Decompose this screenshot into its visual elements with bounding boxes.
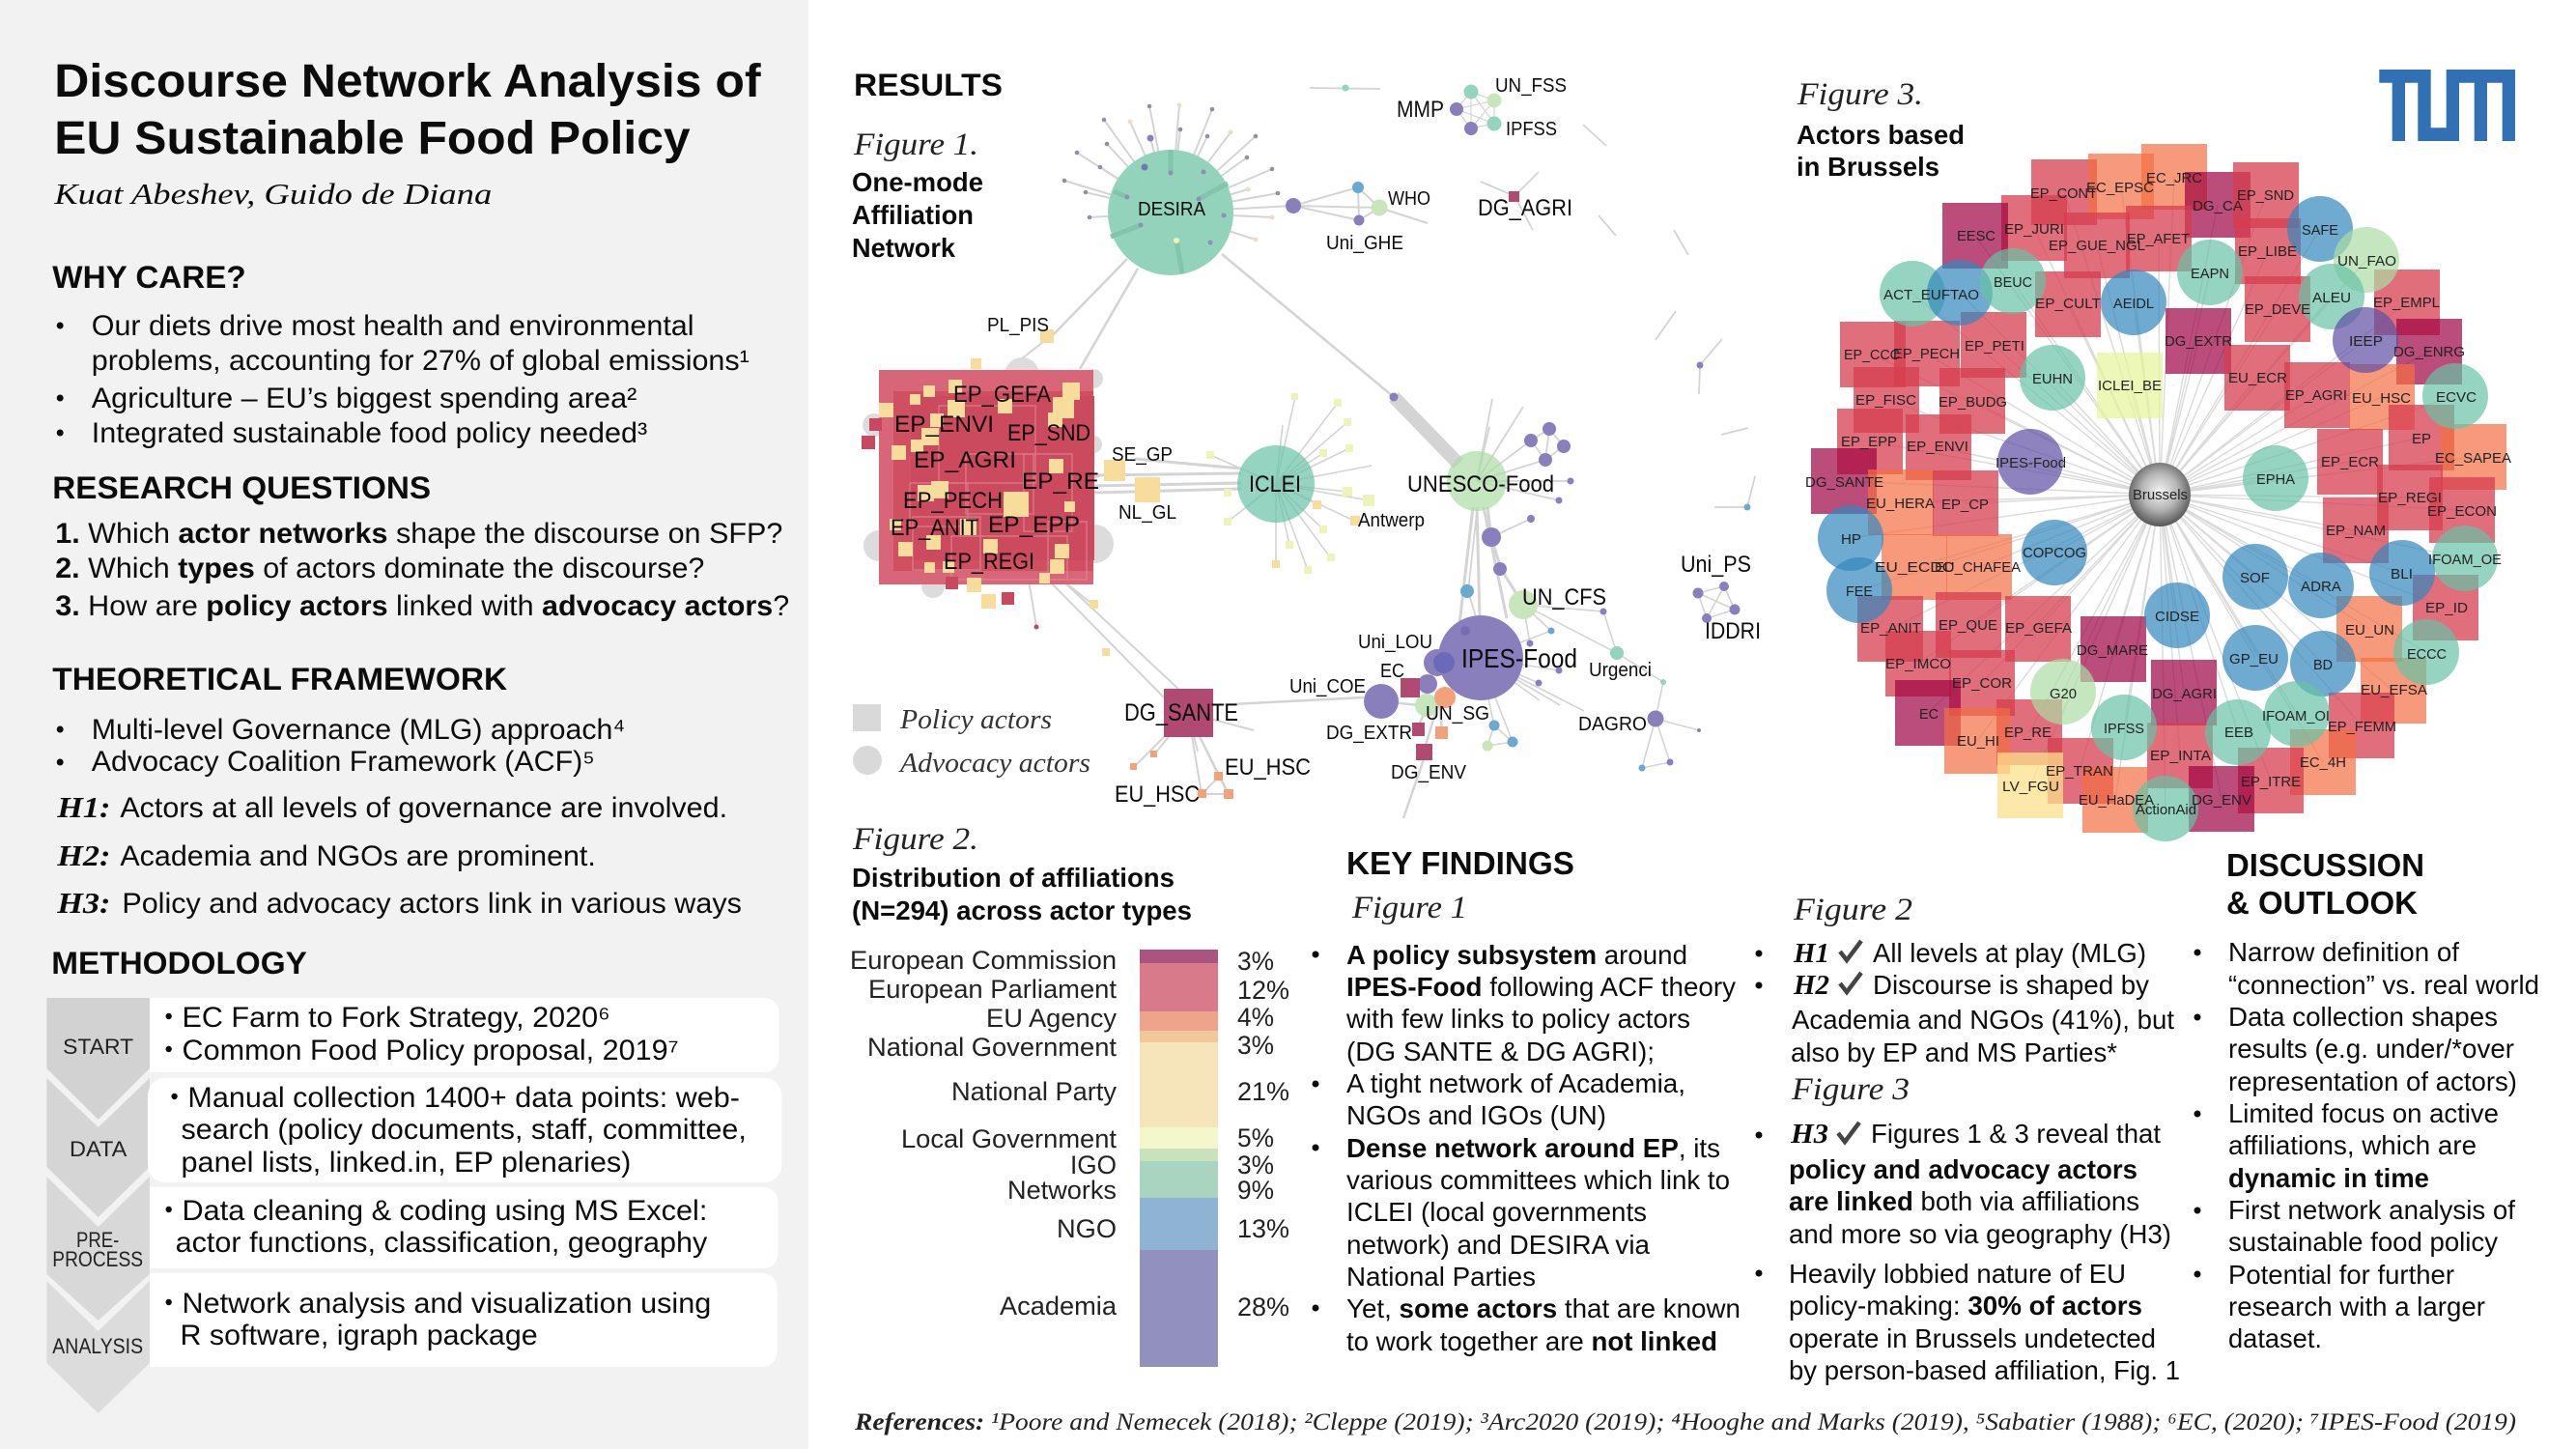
actor labels: EP_ENVI: [1907, 439, 1968, 455]
node labels: UN_FSS: [1495, 75, 1567, 97]
small nodes: [1033, 85, 1750, 799]
node labels: IDDRI: [1705, 618, 1761, 644]
actor labels: ActionAid: [2136, 802, 2196, 818]
section: key findings: KEY FINDINGS: [1346, 845, 1574, 881]
section: key findings figures 2 and 3: Discourse is shaped by: [1873, 970, 2149, 1000]
actor labels: [1805, 170, 2511, 818]
section: why care: problems, accounting for 27% of global emissions¹: [92, 345, 750, 377]
section: key findings figures 2 and 3: operate in Brussels undetected: [1789, 1323, 2156, 1353]
section: theoretical framework: Policy and advocacy actors link in various ways: [122, 888, 742, 920]
figure 1: affiliation network: [862, 75, 1761, 818]
actor labels: GP_EU: [2229, 651, 2279, 668]
section: key findings figures 2 and 3: are linked both via affiliations: [1789, 1186, 2139, 1216]
actor labels: EU_UN: [2345, 622, 2394, 639]
section: discussion and outlook: sustainable food policy: [2228, 1227, 2498, 1257]
section: why care: WHY CARE?: [52, 260, 246, 295]
node labels: Urgenci: [1589, 660, 1652, 681]
figure 3 caption: [1797, 77, 1965, 182]
legend: [853, 704, 1090, 779]
actor labels: IPES-Food: [1996, 455, 2066, 471]
actor labels: EU_HaDEA: [2079, 792, 2154, 809]
actor labels: IEEP: [2349, 333, 2383, 350]
section: research questions: 2. Which types of actors dominate the discourse?: [55, 553, 704, 584]
actor labels: EESC: [1957, 228, 1996, 244]
actor labels: EC: [1919, 706, 1939, 723]
figure 1 caption: One-mode: [852, 167, 983, 197]
box: analysis: Network analysis and visualization using: [183, 1288, 711, 1320]
actor labels: EC_JRC: [2146, 170, 2202, 186]
actor labels: EP_ECR: [2321, 454, 2379, 470]
figure 2 caption: Distribution of affiliations: [852, 863, 1175, 893]
arrow: pre-process: PRE-: [76, 1228, 119, 1252]
category labels: National Party: [951, 1077, 1117, 1106]
icon: check: [1838, 1122, 1859, 1142]
node labels: [891, 75, 1761, 808]
section: theoretical framework: Multi-level Governance (MLG) approach⁴: [92, 714, 625, 746]
panel: left sidebar: [0, 0, 808, 1449]
node: IPES-Food: IPES-Food: [1461, 643, 1577, 673]
node labels: EP_PECH: [903, 488, 1003, 514]
node labels: WHO: [1388, 188, 1430, 210]
node labels: EP_GEFA: [953, 382, 1051, 408]
percentages: 12%: [1237, 976, 1289, 1005]
section: key findings: NGOs and IGOs (UN): [1346, 1100, 1606, 1130]
actor labels: Brussels: [2133, 487, 2188, 503]
advocacy actor circles: [1818, 196, 2498, 841]
section: key findings figures 2 and 3: policy and advocacy actors: [1789, 1154, 2137, 1184]
actor labels: EP_RE: [2004, 724, 2052, 741]
icon: check: [1840, 941, 1861, 960]
methodology flow: [46, 998, 781, 1413]
percentages: 13%: [1237, 1214, 1289, 1243]
actor labels: ECCC: [2407, 646, 2447, 663]
section: key findings figures 2 and 3: H3: [1790, 1119, 1828, 1150]
actor labels: EP: [2412, 431, 2431, 447]
section: key findings figures 2 and 3: H1: [1793, 938, 1829, 969]
category labels: European Commission: [850, 946, 1117, 975]
arrow: pre-process: [46, 1177, 150, 1321]
node labels: DG_AGRI: [1478, 195, 1572, 221]
box: pre-process: [150, 1187, 778, 1268]
percentages: 9%: [1237, 1176, 1274, 1205]
actor labels: EP_ITRE: [2241, 774, 2301, 790]
actor labels: EP_ECON: [2427, 503, 2497, 520]
actor labels: EC_SAPEA: [2435, 450, 2511, 467]
section: discussion and outlook: First network analysis of: [2228, 1195, 2515, 1225]
section: key findings figures 2 and 3: [1756, 893, 2180, 1385]
actor labels: EP_AGRI: [2285, 387, 2347, 404]
actor labels: EU_HSC: [2352, 390, 2411, 407]
section: key findings: [1312, 845, 1741, 1356]
node: Brussels hub: [2129, 463, 2191, 526]
section: why care: Our diets drive most health and environmental: [92, 310, 694, 342]
node labels: NL_GL: [1118, 502, 1176, 524]
section: why care: [52, 260, 750, 449]
percentages: 5%: [1237, 1123, 1274, 1152]
actor labels: ICLEI_BE: [2098, 378, 2162, 394]
title: Discourse Network Analysis of: [54, 56, 761, 107]
node: ICLEI: ICLEI: [1249, 471, 1301, 497]
section: key findings: A tight network of Academia,: [1346, 1068, 1685, 1098]
title: [54, 56, 761, 164]
section: key findings: Yet, some actors that are known: [1346, 1293, 1741, 1323]
actor labels: EC_EPSC: [2086, 180, 2154, 196]
policy actor squares: [1811, 144, 2506, 833]
box: start: [150, 998, 778, 1072]
arrow: analysis: [46, 1281, 150, 1413]
edges: [1005, 88, 1755, 818]
actor labels: AEIDL: [2113, 296, 2154, 312]
actor labels: EPHA: [2256, 471, 2295, 488]
node labels: EU_HSC: [1115, 781, 1200, 808]
heading: methodology: METHODOLOGY: [51, 946, 307, 980]
actor labels: EU_ECDC: [1875, 559, 1954, 576]
figure 2 caption: (N=294) across actor types: [852, 895, 1192, 925]
actor labels: DG_SANTE: [1805, 474, 1883, 491]
section: key findings: to work together are not linked: [1346, 1326, 1717, 1356]
references: References: ¹Poore and Nemecek (2018); ²Cleppe (2019); ³Arc2020 (2019); ⁴Hooghe and Marks (2019), ⁵Sabatier (1988); ⁶EC, (2020); ⁷IPES-Food (2019): [854, 1409, 2516, 1435]
node labels: EP_SND: [1007, 420, 1090, 446]
box: start: EC Farm to Fork Strategy, 2020⁶: [183, 1002, 610, 1034]
node labels: Antwerp: [1358, 510, 1425, 531]
node: IPES-Food: [1438, 615, 1577, 700]
actor labels: CIDSE: [2155, 609, 2199, 625]
section: discussion and outlook: Data collection shapes: [2228, 1002, 2498, 1032]
box: data: search (policy documents, staff, committee,: [182, 1114, 747, 1146]
node labels: EC: [1380, 661, 1404, 682]
section: key findings figures 2 and 3: also by EP and MS Parties*: [1791, 1037, 2117, 1067]
heading: results: RESULTS: [854, 68, 1003, 102]
section: key findings: A policy subsystem around: [1346, 940, 1687, 970]
section: theoretical framework: Academia and NGOs are prominent.: [120, 840, 596, 872]
section: key findings: Figure 1: [1351, 891, 1467, 925]
actor labels: EP_GUE_NGL: [2049, 238, 2145, 254]
section: discussion and outlook: representation of actors): [2228, 1066, 2517, 1096]
actor labels: DG_EXTR: [2165, 333, 2232, 350]
EP cluster: [862, 329, 1160, 609]
node: DG_SANTE: [1124, 689, 1238, 737]
section: theoretical framework: H3:: [56, 887, 110, 920]
node: ICLEI: [1237, 445, 1315, 523]
box: data: Manual collection 1400+ data points: web-: [187, 1082, 740, 1114]
actor labels: EU_EFSA: [2361, 682, 2427, 698]
actor labels: EUHN: [2032, 371, 2073, 387]
node labels: Uni_LOU: [1358, 632, 1432, 653]
section: key findings figures 2 and 3: by person-based affiliation, Fig. 1: [1789, 1355, 2180, 1385]
figure 1 caption: Network: [852, 233, 955, 263]
node: DESIRA: DESIRA: [1138, 199, 1206, 220]
node labels: IPFSS: [1506, 119, 1557, 140]
section: theoretical framework: THEORETICAL FRAMEWORK: [52, 662, 507, 696]
section: discussion and outlook: “connection” vs. real world: [2228, 970, 2539, 1000]
percentages: 3%: [1237, 1031, 1274, 1060]
actor labels: ALEU: [2312, 290, 2351, 306]
node labels: EP_AGRI: [914, 447, 1016, 473]
section: discussion and outlook: Potential for further: [2228, 1260, 2454, 1290]
actor labels: EP_ID: [2425, 600, 2468, 616]
actor labels: IFOAM_OI: [2262, 708, 2330, 724]
arrow: data: [46, 1078, 150, 1217]
spokes: [1844, 177, 2474, 809]
figure 3 caption: Actors based: [1797, 120, 1965, 150]
actor labels: EP_AFET: [2127, 231, 2190, 247]
legend: Advocacy actors: [898, 749, 1090, 779]
actor labels: EP_PECH: [1893, 346, 1960, 362]
actor labels: DG_ENRG: [2393, 344, 2465, 360]
stacked bar: [1140, 950, 1218, 1367]
section: key findings: (DG SANTE & DG AGRI);: [1346, 1037, 1655, 1066]
node labels: Uni_PS: [1681, 552, 1751, 578]
figure 3: Brussels network: [1805, 144, 2511, 841]
actor labels: DG_ENV: [2192, 792, 2251, 809]
actor labels: EP_LIBE: [2238, 243, 2297, 260]
actor labels: BLI: [2391, 566, 2413, 582]
percentages: 21%: [1237, 1077, 1289, 1106]
category labels: Networks: [1007, 1176, 1117, 1205]
actor labels: EP_TRAN: [2046, 763, 2113, 780]
actor labels: EC_4H: [2300, 754, 2346, 771]
actor labels: ECVC: [2436, 389, 2477, 406]
percentages: [1237, 947, 1289, 1321]
section: discussion and outlook: [2194, 847, 2539, 1353]
category labels: NGO: [1057, 1214, 1117, 1243]
section: key findings: ICLEI (local governments: [1346, 1197, 1647, 1227]
section: discussion and outlook: results (e.g. under/*over: [2228, 1034, 2514, 1064]
icon: TUM logo: [2379, 70, 2515, 141]
section: why care: Agriculture – EU’s biggest spending area²: [92, 383, 637, 414]
figure 2 caption: Figure 2.: [852, 822, 978, 857]
section: discussion and outlook: dataset.: [2228, 1323, 2322, 1353]
category labels: Local Government: [901, 1124, 1117, 1153]
section: key findings: with few links to policy actors: [1345, 1004, 1690, 1034]
section: key findings: National Parties: [1346, 1262, 1536, 1292]
DESIRA spoke end dots: [1062, 102, 1280, 242]
section: key findings figures 2 and 3: and more so via geography (H3): [1789, 1219, 2171, 1249]
node labels: DAGRO: [1578, 714, 1647, 735]
actor labels: EP_NAM: [2326, 523, 2386, 539]
actor labels: EP_PETI: [1965, 338, 2024, 355]
category labels: [850, 946, 1118, 1321]
section: research questions: 3. How are policy actors linked with advocacy actors?: [55, 590, 789, 622]
actor labels: DG_MARE: [2077, 642, 2148, 659]
actor labels: UN_FAO: [2337, 253, 2396, 270]
node labels: UN_SG: [1426, 703, 1489, 724]
figure 2 caption: [852, 822, 1192, 925]
category labels: EU Agency: [986, 1004, 1118, 1033]
actor labels: FEE: [1846, 583, 1873, 600]
percentages: 28%: [1237, 1293, 1289, 1321]
arrow: analysis: ANALYSIS: [52, 1334, 143, 1358]
node labels: DG_EXTR: [1326, 723, 1412, 744]
actor labels: EAPN: [2191, 266, 2229, 282]
actor labels: DG_AGRI: [2152, 686, 2217, 702]
box: pre-process: Data cleaning & coding using MS Excel:: [183, 1195, 707, 1227]
box: pre-process: actor functions, classification, geography: [176, 1227, 707, 1259]
figure 1 caption: Affiliation: [852, 200, 974, 230]
figure 1 caption: Figure 1.: [853, 128, 978, 162]
section: key findings figures 2 and 3: Heavily lobbied nature of EU: [1789, 1259, 2126, 1289]
actor labels: IFOAM_OE: [2428, 552, 2502, 568]
title: EU Sustainable Food Policy: [54, 113, 691, 164]
section: key findings: various committees which link to: [1346, 1165, 1730, 1195]
actor labels: EP_FISC: [1855, 392, 1916, 409]
section: key findings figures 2 and 3: All levels at play (MLG): [1873, 938, 2146, 968]
box: analysis: [150, 1273, 777, 1367]
section: theoretical framework: H1:: [56, 791, 110, 824]
figure 3 caption: Figure 3.: [1797, 77, 1923, 112]
node labels: EP_ENVI: [894, 412, 994, 438]
section: research questions: 1. Which actor networks shape the discourse on SFP?: [55, 518, 782, 550]
percentages: 3%: [1237, 1151, 1274, 1179]
actor labels: EP_GEFA: [2005, 620, 2072, 637]
grey blobs behind EP cluster: [863, 357, 1114, 598]
section: key findings figures 2 and 3: H2: [1793, 970, 1829, 1001]
section: key findings figures 2 and 3: Academia and NGOs (41%), but: [1792, 1005, 2174, 1035]
section: discussion and outlook: Narrow definition of: [2228, 937, 2459, 967]
actor labels: EP_INTA: [2150, 748, 2211, 764]
section: theoretical framework: [52, 662, 742, 920]
actor labels: BEUC: [1994, 274, 2032, 291]
section: why care: Integrated sustainable food policy needed³: [92, 417, 647, 449]
actor labels: EP_CP: [1941, 497, 1989, 513]
percentages: 3%: [1237, 947, 1274, 976]
section: theoretical framework: Advocacy Coalition Framework (ACF)⁵: [92, 746, 595, 778]
actor labels: SAFE: [2302, 222, 2338, 239]
percentages: 4%: [1237, 1003, 1274, 1032]
actor labels: DG_CA: [2193, 198, 2243, 214]
box: data: panel lists, linked.in, EP plenaries): [182, 1147, 631, 1179]
actor labels: SOF: [2240, 570, 2270, 586]
node labels: PL_PIS: [987, 315, 1049, 336]
arrow: start: [46, 998, 150, 1120]
actor labels: EP_BUDG: [1939, 394, 2007, 411]
section: discussion and outlook: & OUTLOOK: [2226, 885, 2418, 921]
icon: check: [1840, 973, 1861, 992]
section: key findings: Dense network around EP, its: [1346, 1133, 1720, 1163]
actor labels: COPCOG: [2023, 545, 2086, 561]
actor labels: EEB: [2224, 724, 2253, 741]
actor labels: EP_CULT: [2035, 296, 2101, 312]
section: discussion and outlook: Limited focus on active: [2228, 1098, 2499, 1128]
section: discussion and outlook: DISCUSSION: [2226, 847, 2424, 883]
arrow: pre-process: PROCESS: [52, 1247, 143, 1271]
node: DG_SANTE: DG_SANTE: [1124, 699, 1238, 726]
actor labels: EP_CCC: [1844, 347, 1900, 363]
node labels: EU_HSC: [1225, 754, 1311, 781]
section: key findings: network) and DESIRA via: [1346, 1230, 1651, 1260]
actor labels: EP_FEMM: [2328, 719, 2396, 735]
arrow: start: START: [63, 1035, 133, 1059]
section: key findings figures 2 and 3: policy-making: 30% of actors: [1789, 1291, 2142, 1321]
figure 2: stacked bar chart: [850, 946, 1289, 1367]
node labels: EP_REGI: [944, 549, 1034, 575]
actor labels: EP_ANIT: [1860, 620, 1921, 637]
figure 3 caption: in Brussels: [1797, 152, 1939, 182]
node labels: UN_CFS: [1522, 584, 1606, 611]
actor labels: HP: [1841, 531, 1861, 548]
category labels: National Government: [867, 1033, 1117, 1062]
legend: Policy actors: [899, 705, 1052, 735]
actor labels: EP_JURI: [2004, 221, 2064, 238]
actor labels: ADRA: [2301, 579, 2341, 595]
actor labels: IPFSS: [2104, 721, 2144, 737]
actor labels: G20: [2050, 686, 2077, 702]
node labels: EP_ANIT: [891, 515, 978, 541]
node labels: EP_EPP: [988, 512, 1080, 538]
authors: Kuat Abeshev, Guido de Diana: [53, 178, 492, 211]
actor labels: EP_EMPL: [2373, 295, 2440, 311]
actor labels: EU_HERA: [1866, 496, 1935, 512]
category labels: Academia: [1000, 1292, 1118, 1321]
section: theoretical framework: H2:: [56, 839, 110, 872]
node: UNESCO-Food: UNESCO-Food: [1407, 471, 1554, 497]
arrow: data: DATA: [70, 1137, 127, 1161]
actor labels: EU_HI: [1957, 733, 1999, 750]
actor labels: EP_COR: [1952, 675, 2012, 692]
section: research questions: RESEARCH QUESTIONS: [52, 470, 431, 505]
section: discussion and outlook: dynamic in time: [2228, 1163, 2429, 1193]
actor labels: BD: [2313, 657, 2333, 673]
actor labels: EP_DEVE: [2245, 301, 2310, 318]
node labels: MMP: [1397, 97, 1444, 123]
node labels: SE_GP: [1112, 444, 1173, 466]
section: key findings figures 2 and 3: Figure 2: [1793, 893, 1912, 927]
node labels: Uni_COE: [1289, 676, 1366, 697]
actor labels: EP_REGI: [2378, 490, 2442, 506]
node labels: Uni_GHE: [1326, 233, 1403, 254]
box: start: Common Food Policy proposal, 2019⁷: [183, 1035, 679, 1066]
section: discussion and outlook: affiliations, which are: [2228, 1130, 2477, 1160]
node: UNESCO-Food: [1407, 451, 1554, 511]
category labels: IGO: [1070, 1151, 1117, 1179]
section: theoretical framework: Actors at all levels of governance are involved.: [120, 792, 727, 824]
section: key findings figures 2 and 3: Figures 1 & 3 reveal that: [1871, 1119, 2161, 1149]
figure 1 caption: [852, 128, 983, 263]
section: discussion and outlook: research with a larger: [2228, 1292, 2485, 1321]
actor labels: EP_QUE: [1939, 617, 1997, 634]
node labels: DG_ENV: [1391, 762, 1467, 783]
section: key findings figures 2 and 3: Figure 3: [1791, 1072, 1910, 1107]
actor labels: ACT_EUFTAO: [1883, 287, 1979, 303]
actor labels: EP_IMCO: [1885, 656, 1951, 672]
actor labels: EP_CONT: [2030, 185, 2097, 202]
actor labels: EP_EPP: [1841, 434, 1897, 450]
actor labels: LV_FGU: [2002, 779, 2059, 795]
section: key findings: IPES-Food following ACF theory: [1346, 972, 1736, 1002]
actor labels: EU_CHAFEA: [1935, 559, 2021, 576]
actor labels: EP_SND: [2237, 187, 2294, 204]
section: research questions: [52, 470, 789, 622]
node: DESIRA: [1108, 150, 1233, 275]
category labels: European Parliament: [868, 975, 1118, 1004]
box: data: [148, 1078, 781, 1182]
box: analysis: R software, igraph package: [181, 1320, 538, 1351]
actor labels: EU_ECR: [2228, 370, 2287, 386]
node labels: EP_RE: [1022, 469, 1099, 495]
